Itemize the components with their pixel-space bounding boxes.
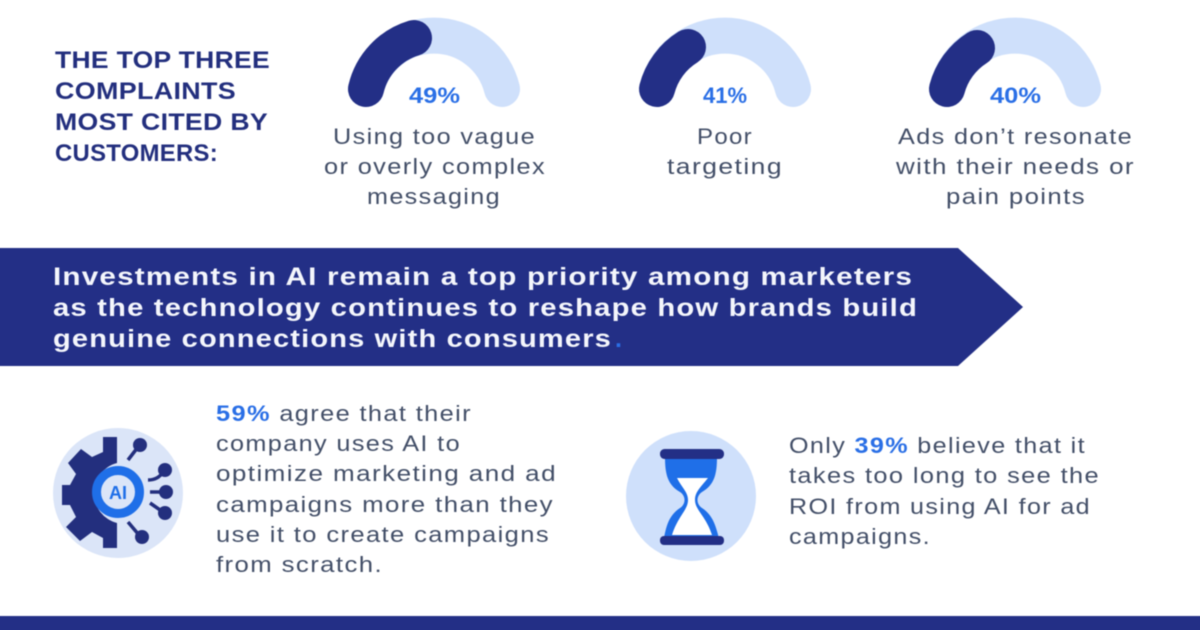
label: vague messaging: Using too vague [333, 124, 536, 149]
label: ads don't resonate: Ads don’t resonate [898, 124, 1133, 149]
banner text: genuine connections with consumers [53, 325, 612, 353]
label: poor targeting [667, 124, 783, 179]
gauge 41% [657, 36, 793, 89]
label: ads don't resonate: pain points [946, 184, 1086, 209]
text: 59% agree [216, 401, 557, 577]
icon: AI gear [53, 428, 183, 558]
gauge 49% [366, 36, 502, 89]
text: only 39% [789, 433, 1100, 549]
banner text: Investments in AI remain a top priority among marketers [53, 263, 913, 291]
value 41%: 41% [703, 83, 747, 108]
text: only 39%: takes too long to see the [789, 463, 1100, 488]
label: ads don't resonate: with their needs or [895, 154, 1135, 179]
text: only 39%: Only 39% believe that it [789, 433, 1086, 458]
value 40%: 40% [990, 83, 1041, 108]
value 49%: 49% [409, 83, 460, 108]
panel: AI usage [53, 401, 557, 577]
gauge 40% [947, 36, 1083, 89]
banner arrow [0, 248, 1023, 366]
text: 59% agree: optimize marketing and ad [216, 461, 557, 486]
heading: top three complaints: MOST CITED BY [55, 109, 268, 136]
banner text: as the technology continues to reshape how brands build [53, 294, 918, 322]
label: vague messaging: messaging [367, 184, 501, 209]
heading: top three complaints: COMPLAINTS [55, 78, 236, 105]
text: 59% agree: use it to create campaigns [216, 522, 550, 547]
footer bar [0, 616, 1200, 630]
text: 59% agree: 59% agree that their [216, 401, 472, 426]
label: vague messaging: or overly complex [324, 154, 546, 179]
text: only 39%: ROI from using AI for ad [789, 494, 1091, 519]
banner text: . [615, 325, 623, 353]
label: vague messaging [324, 124, 546, 209]
heading: top three complaints: THE TOP THREE [55, 47, 270, 74]
text: only 39%: campaigns. [789, 524, 931, 549]
text: 59% agree: from scratch. [216, 552, 383, 577]
panel: ROI [626, 431, 1100, 561]
panel: complaint 49% [324, 36, 546, 209]
label: poor targeting: Poor [697, 124, 753, 149]
banner text [53, 263, 918, 353]
heading: top three complaints: CUSTOMERS: [55, 140, 218, 167]
icon: hourglass [626, 431, 756, 561]
heading: top three complaints [55, 47, 270, 167]
label: poor targeting: targeting [667, 154, 783, 179]
label: ads don't resonate [895, 124, 1135, 209]
text: 59% agree: campaigns more than they [216, 492, 554, 517]
text: 59% agree: company uses AI to [216, 431, 461, 456]
panel: complaint 40% [895, 36, 1135, 209]
icon: AI gear: AI [109, 483, 127, 503]
panel: complaint 41% [657, 36, 793, 179]
